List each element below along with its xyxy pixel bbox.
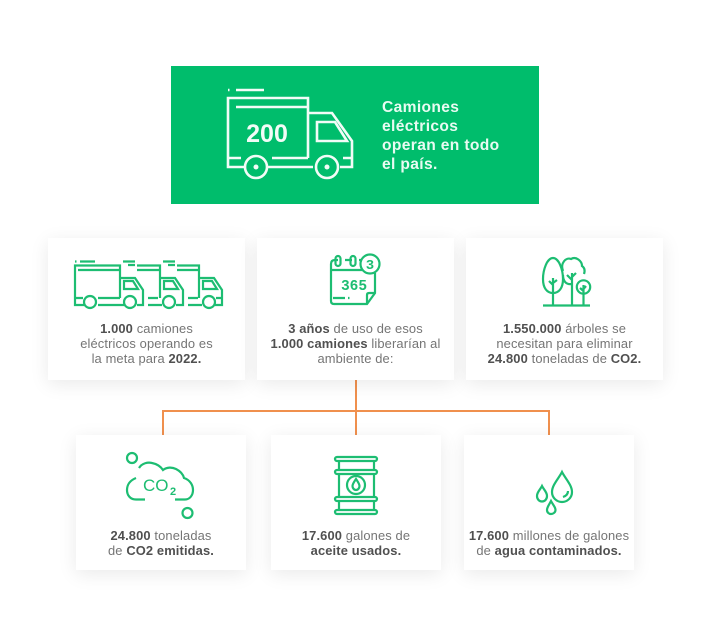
top panel text: eléctricos bbox=[382, 118, 458, 135]
card: CO2 bbox=[76, 435, 246, 570]
top panel truck icon: 200 bbox=[246, 120, 288, 148]
card text: 1.000 camiones liberarían al bbox=[271, 336, 440, 351]
icon: CO2 cloud: 2 bbox=[170, 486, 176, 498]
card text: la meta para 2022. bbox=[92, 351, 201, 366]
card text bbox=[302, 528, 410, 558]
card text bbox=[271, 321, 440, 366]
card text: 1.000 camiones bbox=[100, 321, 193, 336]
card text: 17.600 galones de bbox=[302, 528, 410, 543]
card text bbox=[108, 528, 214, 558]
card text: eléctricos operando es bbox=[80, 336, 213, 351]
top panel: 200 trucks bbox=[171, 66, 539, 204]
card text: aceite usados. bbox=[311, 543, 401, 558]
card text bbox=[80, 321, 213, 366]
card text: 3 años de uso de esos bbox=[288, 321, 423, 336]
card: 1.000 trucks goal bbox=[48, 238, 245, 380]
card text: ambiente de: bbox=[317, 351, 394, 366]
card text: 1.550.000 árboles se bbox=[503, 321, 626, 336]
card text bbox=[488, 321, 641, 366]
card: oil bbox=[271, 435, 441, 570]
card text: de agua contaminados. bbox=[476, 543, 622, 558]
icon: calendar 365: 365 bbox=[341, 279, 367, 295]
top panel text bbox=[382, 99, 500, 173]
card: 3 years bbox=[257, 238, 454, 380]
card text: 24.800 toneladas bbox=[110, 528, 212, 543]
card text: 24.800 toneladas de CO2. bbox=[488, 351, 641, 366]
top panel text: operan en todo bbox=[382, 137, 500, 154]
card text: de CO2 emitidas. bbox=[108, 543, 214, 558]
card text: 17.600 millones de galones bbox=[469, 528, 629, 543]
icon: calendar 365: 3 bbox=[366, 258, 374, 274]
icon: CO2 cloud: CO bbox=[143, 476, 168, 495]
top panel text: el país. bbox=[382, 156, 438, 173]
card: water bbox=[464, 435, 634, 570]
card: trees bbox=[466, 238, 663, 380]
top panel text: Camiones bbox=[382, 99, 459, 116]
card text bbox=[469, 528, 629, 558]
card text: necesitan para eliminar bbox=[496, 336, 633, 351]
